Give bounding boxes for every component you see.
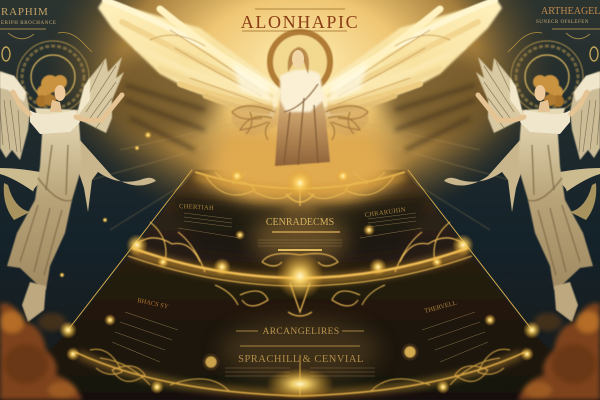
right subheading: SUNECR OF6LEFEN <box>536 20 589 25</box>
lower heading: archangels: ARCANGELIRES <box>262 327 340 337</box>
right heading rule <box>552 29 600 39</box>
clouds left <box>0 303 82 400</box>
dividers in centre <box>236 232 364 346</box>
medallion left <box>204 355 218 369</box>
title: ALONHAPIC <box>241 12 359 32</box>
left subheading: ERIPH BROCHANCE <box>1 21 57 26</box>
middle gold arc <box>128 222 472 316</box>
arc glow underlay <box>78 176 522 394</box>
title rules <box>242 9 347 31</box>
tier heading: lower right: THERVELL <box>424 300 457 315</box>
right angel <box>444 32 600 322</box>
gold line rows on panels <box>112 213 488 376</box>
left heading: RAPHIM <box>1 6 49 18</box>
left heading rule <box>0 29 46 39</box>
central light glow <box>45 0 555 235</box>
tier heading: centre: CENRADECMS <box>266 217 334 228</box>
tier heading: cherubim left: CHERTIAH <box>179 203 214 212</box>
lower heading: sprachill: SPRACHILL & CENVIAL <box>238 354 364 365</box>
panel: tiered pyramid <box>0 130 600 400</box>
lower gold arc <box>75 349 525 396</box>
central wings <box>98 0 502 140</box>
upper gold arc <box>195 172 405 206</box>
upper side warm haze <box>100 50 500 140</box>
light rays <box>90 120 510 260</box>
right heading: ARTHEAGEL <box>541 6 600 17</box>
dark streaks under wings <box>125 85 475 150</box>
clouds right <box>518 303 600 400</box>
left angel <box>0 32 156 322</box>
medallion right <box>403 345 417 359</box>
pyramid edges <box>68 170 532 330</box>
tier heading: cherubim right: CHRARUHIN <box>364 206 406 219</box>
central figure <box>270 32 330 166</box>
glowing stars <box>59 131 541 400</box>
central cone of light <box>200 130 400 205</box>
tier heading: lower left: BHACS SY <box>137 297 169 311</box>
upper side panels <box>170 195 285 258</box>
